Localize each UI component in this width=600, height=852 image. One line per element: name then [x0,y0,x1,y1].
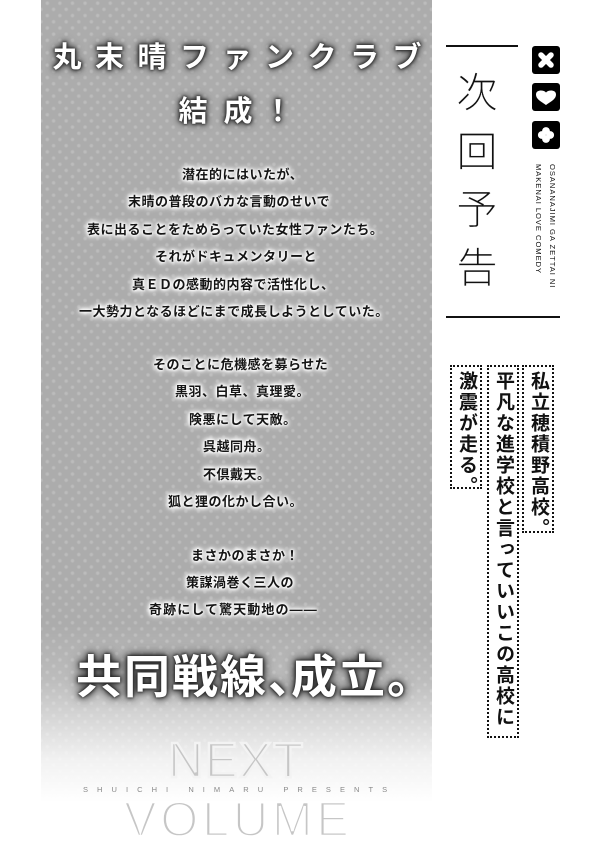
text block: third paragraph: 策謀渦巻く三人の [186,575,294,590]
logo: next volume [124,734,353,847]
heading: next episode preview: 予 [456,187,498,233]
text block: second paragraph: 黒羽、白草、真理愛。 [175,384,310,399]
heading: next episode preview: 次 [456,70,498,116]
headline: united front: 共同戦線、成立。 [76,651,435,703]
text block: second paragraph: 狐と狸の化かし合い。 [168,494,303,509]
text block: first paragraph [76,164,389,322]
callout: tagline column 2 [487,365,519,738]
callout: tagline column 3 [450,365,482,489]
logo: next volume: VOLUME [124,793,353,847]
panel: bottom white fade [41,0,432,852]
heading: fan club title line 1: ラ [350,42,379,74]
heading: fan club title line 2 [174,90,292,130]
text: series name line 1: OSANANAJIMI GA ZETTAI NI [548,164,557,288]
panel: dotted grey background [41,0,432,852]
text block: second paragraph: 険悪にして天敵。 [189,412,297,427]
text block: first paragraph: 末晴の普段のバカな言動のせいで [128,194,330,209]
text block: second paragraph: そのことに危機感を募らせた [153,357,328,372]
heading: fan club title line 1 [49,37,426,75]
heading: next episode preview [456,70,498,291]
heading: fan club title line 1: ク [307,42,336,74]
heading: fan club title line 1: ァ [222,42,252,74]
heading: fan club title line 1: 晴 [137,42,166,74]
text: series name line 2: MAKENAI LOVE COMEDY [534,164,543,274]
icon: heart [532,83,560,111]
heading: fan club title line 2: 結 [178,96,208,128]
rule: bottom [446,316,560,318]
heading: fan club title line 1: 丸 [52,42,82,74]
text block: first paragraph: それがドキュメンタリーと [155,249,317,264]
text block: second paragraph: 不倶戴天。 [203,467,271,482]
text block: first paragraph: 表に出ることをためらっていた女性ファンたち。 [87,222,383,237]
heading: fan club title line 1: 末 [95,42,124,74]
callout: tagline column 3: 激震が走る。 [456,371,477,497]
heading: fan club title line 2: ！ [263,96,292,128]
text block: second paragraph [151,353,330,512]
text block: first paragraph: 一大勢力となるほどにまで成長しようとしていた。 [79,304,389,319]
heading: next episode preview: 告 [456,245,498,291]
rule: top [446,45,518,47]
callout: tagline column 1: 私立穂積野高校。 [528,371,549,539]
heading: next episode preview: 回 [456,129,498,175]
text block: first paragraph: 潜在的にはいたが、 [182,167,303,182]
logo: next volume: NEXT [168,734,305,788]
text block: second paragraph: 呉越同舟。 [203,439,271,454]
heading: fan club title line 1: ブ [392,42,422,74]
icon: clover [532,121,560,149]
callout: tagline column 2: 平凡な進学校と言っていいこの高校に [493,371,514,728]
heading: fan club title line 1: フ [180,42,209,74]
text block: third paragraph [146,546,320,620]
text block: first paragraph: 真ＥＤの感動的内容で活性化し、 [132,277,335,292]
caption: author credit: SHUICHI NIMARU PRESENTS [83,785,396,794]
text block: third paragraph: 奇跡にして驚天動地の―― [149,602,318,617]
callout: tagline column 1 [522,365,554,533]
heading: fan club title line 1: ン [265,42,294,74]
heading: fan club title line 2: 成 [223,96,252,128]
text block: third paragraph: まさかのまさか！ [191,548,299,563]
icon: cross [532,46,560,74]
